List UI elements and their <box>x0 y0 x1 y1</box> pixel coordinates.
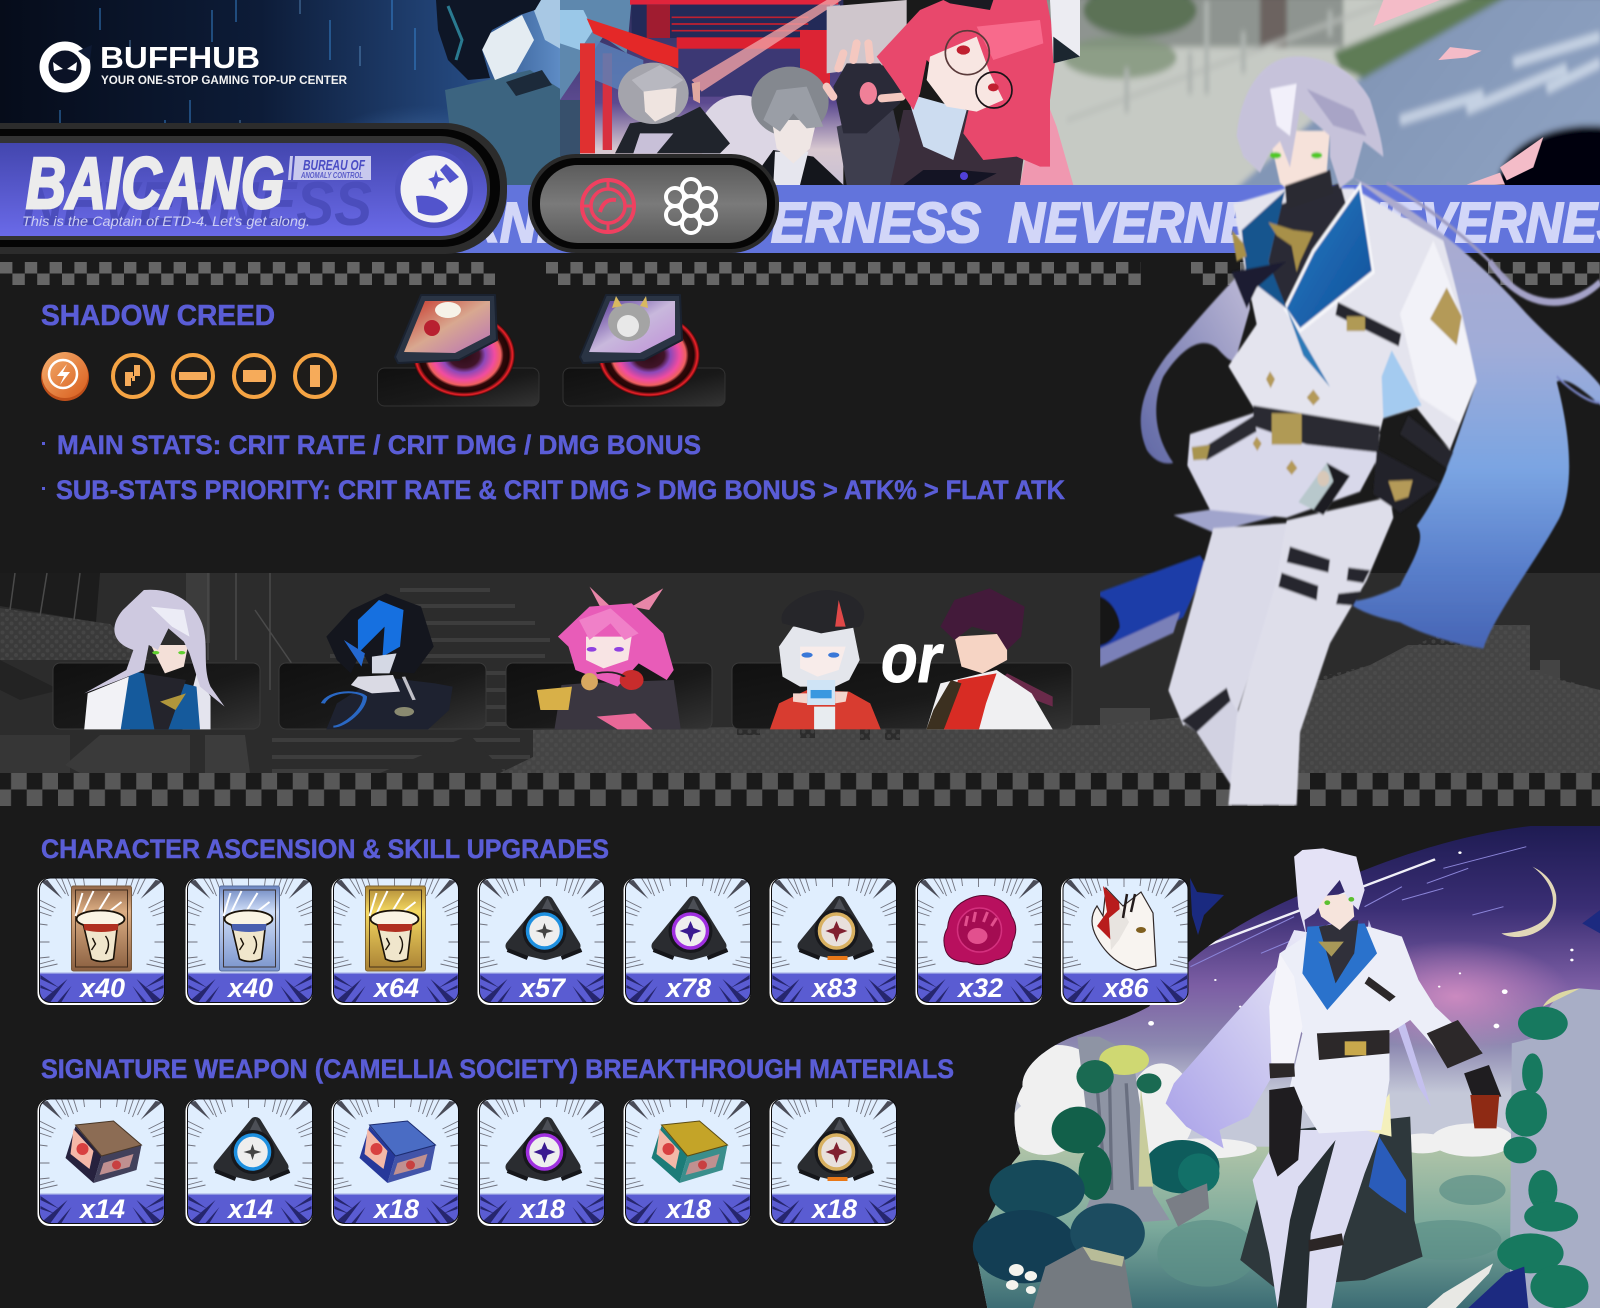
team panel: blue-haired teammate <box>279 593 486 729</box>
item: wax seal <box>916 878 1042 1005</box>
banner: dark-haired man <box>436 0 560 185</box>
panel: drive set icons <box>41 352 335 401</box>
moon <box>1501 867 1556 937</box>
item: silver skill card: x40 <box>226 973 273 1003</box>
gold studs and star <box>1253 288 1462 475</box>
item: gold chip: x83 <box>810 973 857 1003</box>
item: wax seal: x32 <box>956 973 1003 1003</box>
panel: ascension materials <box>38 878 1188 1005</box>
team panel: Baicang <box>53 590 260 729</box>
jacket <box>1278 927 1481 1133</box>
item: blue chip: x14 <box>226 1194 273 1224</box>
text: main stats: MAIN STATS: CRIT RATE / CRIT DMG / DMG BONUS <box>57 430 701 460</box>
rock seat <box>1240 1117 1423 1287</box>
item: fox mask: x86 <box>1101 973 1150 1003</box>
top banner artwork <box>0 0 1600 251</box>
long hair <box>1166 930 1315 1148</box>
icon: disc slot C <box>234 355 274 397</box>
heading: ascension materials: CHARACTER ASCENSION & SKILL UPGRADES <box>41 834 609 864</box>
heading: weapon materials: SIGNATURE WEAPON (CAMELLIA SOCIETY) BREAKTHROUGH MATERIALS <box>41 1054 954 1084</box>
blue coat tail <box>1369 1137 1406 1213</box>
band checker strip <box>0 773 1600 806</box>
rock and daisies <box>1006 1240 1397 1308</box>
grass shading <box>1157 1175 1506 1287</box>
repeating band: NEVERNESS: NEVERNESS <box>1008 191 1323 255</box>
loose strands <box>1387 183 1600 403</box>
item: bronze skill card: x40 <box>78 973 125 1003</box>
item: blue crate: x18 <box>372 1194 419 1224</box>
name pill: Baicang: NEVERNESS <box>22 170 372 239</box>
item: blue crate <box>332 1099 458 1226</box>
item: gold chip <box>770 1099 896 1226</box>
logo: BuffHub: BUFFHUB <box>100 40 260 75</box>
logo: BuffHub <box>44 40 347 88</box>
jacket <box>1228 188 1477 450</box>
foliage <box>973 1045 1161 1283</box>
trousers <box>1168 497 1393 805</box>
icon: set coin <box>41 352 89 401</box>
item: bronze skill card <box>38 878 164 1005</box>
item: gold crate: x18 <box>664 1194 711 1224</box>
panel: weapon materials <box>38 1099 896 1226</box>
stars <box>1148 851 1574 1028</box>
banner: petals <box>1373 0 1543 185</box>
item: gold skill card: x64 <box>372 973 419 1003</box>
icon: disc slot D <box>295 355 335 397</box>
icon: target <box>580 178 636 234</box>
repeating band: NEVERNESS: NEVERNESS <box>324 191 639 255</box>
affiliation tag: BUREAU OF <box>303 157 366 174</box>
head <box>1315 893 1354 930</box>
team panel: pink-haired teammate <box>506 587 712 729</box>
repeating band: NEVERNESS: NEVERNESS <box>666 191 981 255</box>
icon: petal ring <box>666 179 716 233</box>
grey-haired man <box>748 67 843 185</box>
item: purple chip: x78 <box>664 973 711 1003</box>
head <box>1237 57 1383 209</box>
character: white-haired girl <box>770 590 881 729</box>
item: silver skill card <box>186 878 312 1005</box>
item: blue chip <box>478 878 604 1005</box>
panel: W-engine A <box>378 295 539 406</box>
name pill: Baicang <box>0 123 507 254</box>
checker strip <box>0 262 1600 285</box>
banner: night data-stream backdrop <box>0 0 560 124</box>
item: bronze crate: x14 <box>78 1194 125 1224</box>
team panel: alternate teammates <box>732 588 1072 729</box>
item: blue chip <box>186 1099 312 1226</box>
illustration: Baicang under the night sky <box>950 820 1600 1308</box>
icon: buffhub emblem <box>44 45 92 88</box>
clouds <box>1010 1045 1514 1158</box>
coat skirt <box>1187 413 1380 518</box>
logo: BuffHub: YOUR ONE-STOP GAMING TOP-UP CENTER <box>101 73 347 87</box>
item: bronze crate <box>38 1099 164 1226</box>
left hair <box>1141 267 1250 464</box>
gold butterfly <box>1268 222 1313 272</box>
banner: street background, right <box>1020 0 1600 185</box>
item: gold skill card <box>332 878 458 1005</box>
skyline <box>500 625 1600 773</box>
item: blue chip: x57 <box>518 973 567 1003</box>
affiliation tag <box>288 156 371 180</box>
affiliation tag: ANOMALY CONTROL <box>300 171 363 180</box>
icon: disc slot B <box>173 355 213 397</box>
heading: Shadow Creed: SHADOW CREED <box>41 300 275 332</box>
tombstone with vines <box>1497 988 1600 1308</box>
right glove and glass <box>1427 1020 1483 1068</box>
long hair <box>1347 178 1600 649</box>
item: fox mask <box>1061 878 1188 1005</box>
belt and straps <box>1192 230 1400 460</box>
icon: disc slot A <box>113 355 153 397</box>
name: BAICANG: BAICANG <box>26 144 284 224</box>
coat tail <box>1100 555 1207 667</box>
lapels <box>1242 183 1373 387</box>
figure <box>1253 848 1501 1308</box>
item: gold chip <box>770 878 896 1005</box>
icon: S rank badge <box>395 150 473 228</box>
label: or: or <box>881 619 944 697</box>
column <box>1077 1037 1209 1227</box>
character: maroon-haired man <box>926 588 1053 729</box>
quote: This is the Captain of ETD-4. Let's get along. <box>22 213 310 229</box>
attribute pill <box>528 154 779 253</box>
belt <box>1317 1030 1389 1060</box>
butterfly and flowers foreground <box>1427 910 1600 1308</box>
left glove <box>1269 1063 1295 1078</box>
repeating band: NEVERNESS <box>0 185 1600 255</box>
icon: blue butterfly <box>1190 878 1224 935</box>
item: gold chip: x18 <box>810 1194 857 1224</box>
meteor streaks <box>1190 847 1526 967</box>
character: Baicang full figure <box>1100 57 1600 805</box>
pink-haired girl with glove <box>827 0 1080 185</box>
item: purple chip: x18 <box>518 1194 565 1224</box>
banner: red gate with cast <box>560 0 1080 187</box>
text: sub-stats priority: SUB-STATS PRIORITY: CRIT RATE & CRIT DMG > DMG BONUS > ATK% > FLAT ATK <box>56 475 1065 505</box>
lapels and shirt <box>1302 923 1377 1010</box>
cuff and glove <box>1373 416 1453 513</box>
sky and ground <box>950 820 1600 1308</box>
item: gold crate <box>624 1099 750 1226</box>
item: purple chip <box>478 1099 604 1226</box>
grey-haired girl <box>615 63 730 153</box>
trousers <box>1253 1130 1381 1308</box>
panel: team band background <box>0 573 1600 806</box>
panel: W-engine B <box>563 295 725 406</box>
ID badge <box>1298 463 1350 515</box>
item: purple chip <box>624 878 750 1005</box>
